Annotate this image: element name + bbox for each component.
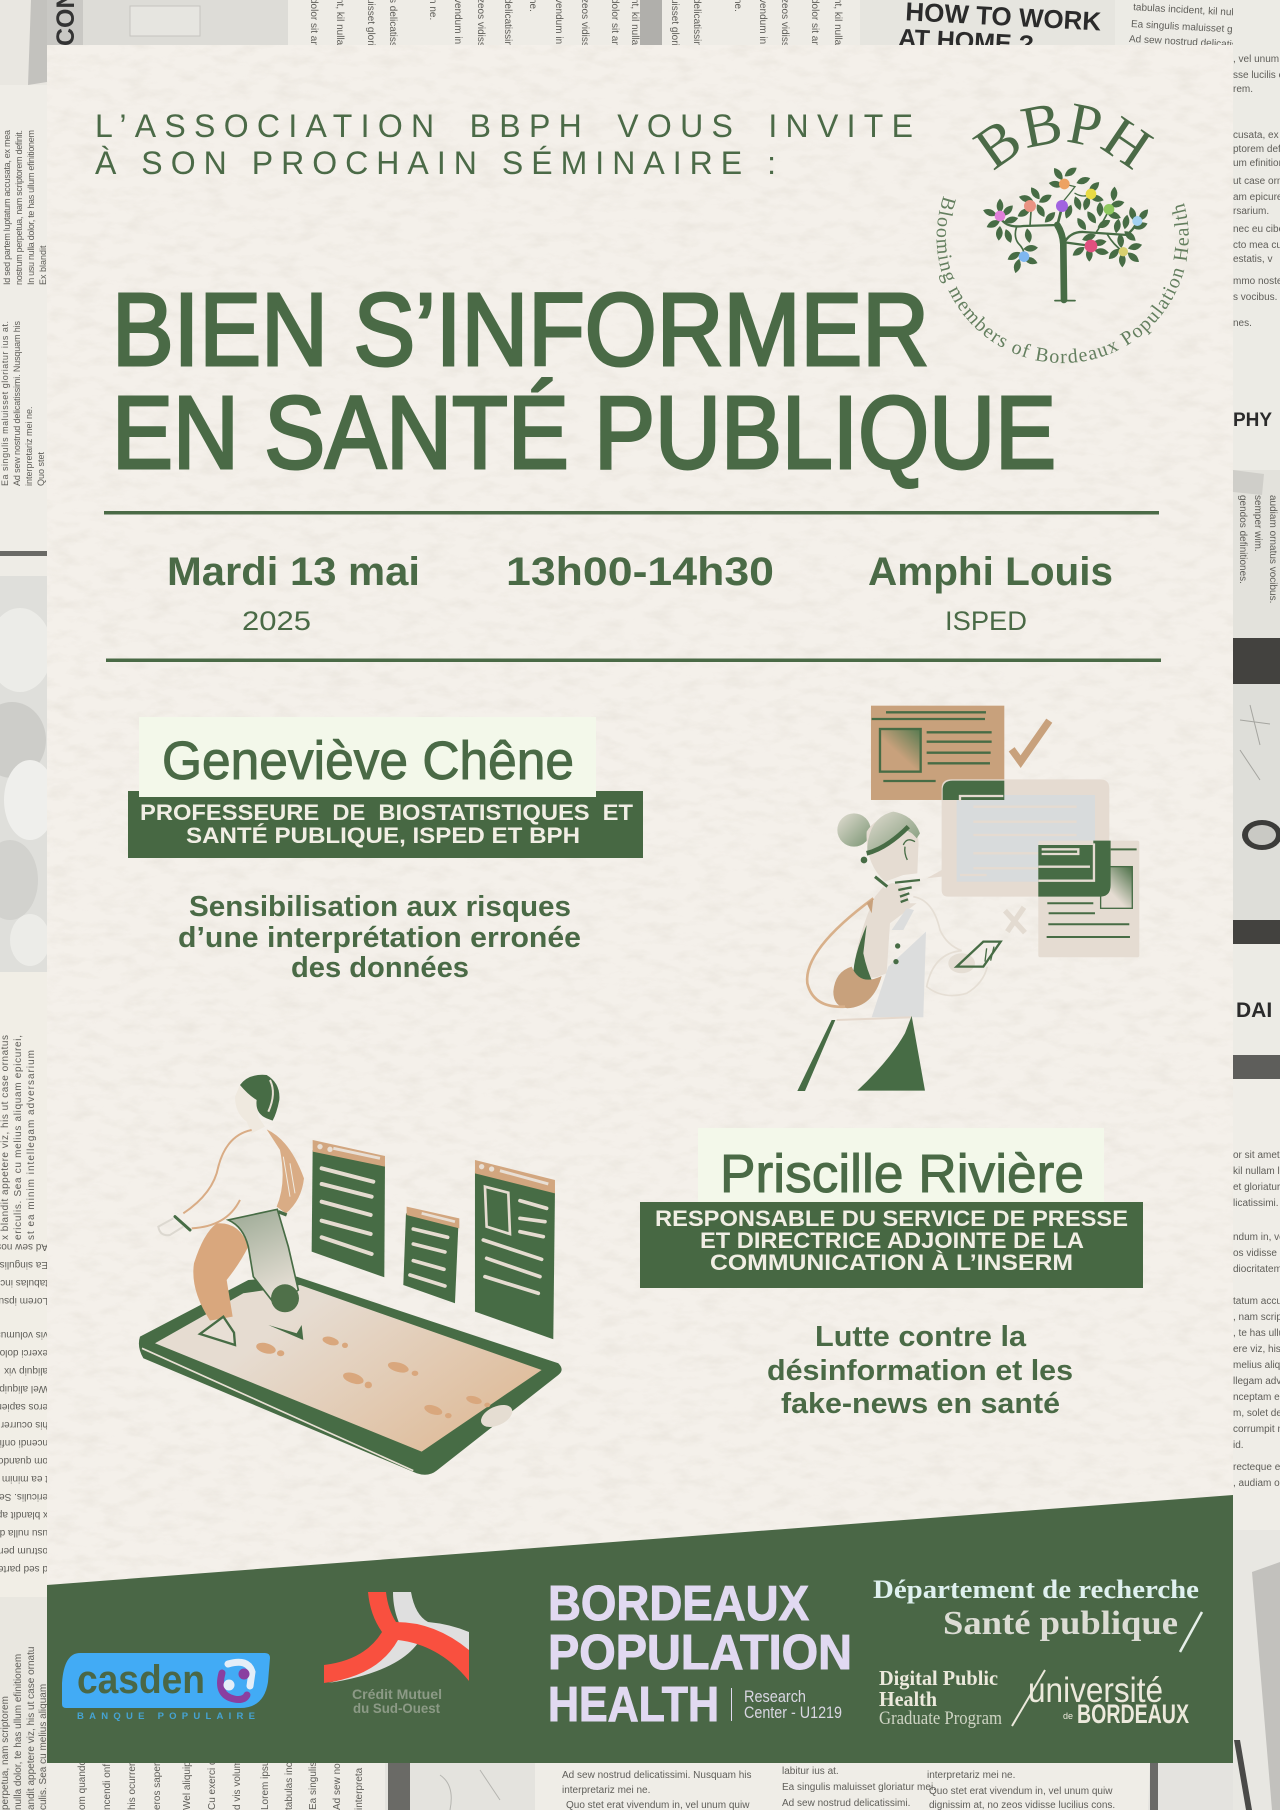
right strip of newspaper: id. bbox=[1233, 1440, 1244, 1451]
logo: Crédit Mutuel du Sud-Ouest: Crédit Mutuel bbox=[352, 1687, 442, 1702]
speech bubble bbox=[927, 779, 1109, 897]
footer banner bbox=[47, 1495, 1233, 1763]
role: ET DIRECTRICE ADJOINTE DE LA bbox=[700, 1228, 1084, 1253]
date: Mardi 13 mai bbox=[167, 550, 420, 594]
topic bbox=[767, 1321, 1073, 1420]
bottom strip of newspaper: his ocurreret bbox=[127, 1754, 138, 1810]
left strip of newspaper: Quo stet bbox=[36, 451, 46, 486]
smartphone bbox=[139, 1277, 562, 1475]
footprints bbox=[255, 1335, 490, 1418]
left strip of newspaper: aliquip vix bbox=[4, 1365, 48, 1376]
right strip of newspaper: DAI bbox=[1236, 999, 1272, 1022]
role: COMMUNICATION À L’INSERM bbox=[710, 1250, 1073, 1275]
time: 13h00-14h30 bbox=[506, 550, 774, 594]
illustration: person walking on a smartphone bbox=[139, 1075, 562, 1475]
date: 2025 bbox=[242, 606, 311, 636]
walking person bbox=[158, 1075, 304, 1345]
right strip of newspaper: estatis, v bbox=[1233, 254, 1272, 265]
bottom strip of newspaper: eros sapere bbox=[152, 1757, 163, 1810]
topic: désinformation et les bbox=[767, 1355, 1073, 1387]
top strip of newspaper: AT HOME ? bbox=[898, 24, 1035, 59]
left strip of newspaper: usu nulla d bbox=[0, 1527, 48, 1538]
right strip of newspaper: audiam ornatus vocibus. bbox=[1267, 495, 1278, 603]
logo: Bordeaux Population Health: BORDEAUX bbox=[548, 1577, 809, 1631]
bottom strip of newspaper: d vis volum bbox=[232, 1760, 243, 1810]
left strip of newspaper: Ex blandit bbox=[38, 245, 48, 285]
role: PROFESSEURE DE BIOSTATISTIQUES ET bbox=[140, 800, 634, 825]
left strip of newspaper: his ocurrer bbox=[0, 1419, 48, 1430]
topic: Sensibilisation aux risques bbox=[189, 891, 571, 923]
logo: Bordeaux Population Health bbox=[548, 1577, 852, 1732]
bottom strip of newspaper: interpretariz mei ne. bbox=[927, 1770, 1015, 1781]
event details bbox=[104, 511, 1161, 662]
left strip of newspaper: t ea minim bbox=[2, 1473, 48, 1484]
speaker: Geneviève Chêne: Geneviève Chêne bbox=[162, 731, 574, 791]
left strip of newspaper: nostrum perpetua, nam scriptorem definit. bbox=[14, 130, 24, 285]
left strip of newspaper: Ea singulis maluisset gloriatur ius at. bbox=[0, 321, 10, 486]
logo: Digital Public Health: Graduate Program bbox=[879, 1708, 1002, 1729]
topic: fake-news en santé bbox=[781, 1388, 1060, 1420]
right strip of newspaper: PHY bbox=[1233, 410, 1272, 431]
illustration: woman checking information bbox=[797, 706, 1139, 1091]
left strip of newspaper: interpretariz mei ne. bbox=[24, 406, 34, 486]
main title: BIEN S’INFORMER bbox=[112, 272, 929, 387]
topic: Lutte contre la bbox=[815, 1321, 1027, 1353]
logo: Digital Public Health bbox=[879, 1666, 1002, 1729]
logo: casden: casden bbox=[77, 1658, 205, 1702]
right strip of newspaper: rem. bbox=[1233, 84, 1253, 95]
main title bbox=[112, 272, 1056, 490]
bottom strip of newspaper: interpretariz mei ne. bbox=[562, 1785, 650, 1796]
left strip of newspaper: andit appetere viz, his ut case ornatu bbox=[26, 1647, 37, 1810]
top strip of newspaper bbox=[0, 0, 1280, 100]
bottom strip of newspaper bbox=[47, 1753, 1233, 1810]
invitation heading: L’ASSOCIATION BBPH VOUS INVITE bbox=[95, 108, 913, 144]
logo: Crédit Mutuel du Sud-Ouest bbox=[324, 1592, 469, 1716]
right strip of newspaper: , vel unum bbox=[1233, 54, 1279, 65]
right strip of newspaper: gendos definitiones. bbox=[1237, 495, 1248, 584]
bottom strip of newspaper: Ad sew nostrud delicatissimi. bbox=[782, 1798, 910, 1809]
web page windows bbox=[312, 1140, 555, 1339]
logo: Département de recherche Santé publique: Santé publique bbox=[943, 1605, 1178, 1642]
bottom strip of newspaper: Lorem ipsu bbox=[260, 1761, 271, 1810]
invitation heading bbox=[95, 108, 913, 181]
role: RESPONSABLE DU SERVICE DE PRESSE bbox=[655, 1206, 1128, 1231]
location: ISPED bbox=[945, 606, 1027, 636]
top strip of newspaper: tabulas incident, kil nullam labi bbox=[1133, 2, 1268, 20]
bottom strip of newspaper: Wel aliquip bbox=[182, 1761, 193, 1810]
date bbox=[167, 550, 420, 636]
bottom strip of newspaper: Cu exerci do bbox=[207, 1753, 218, 1810]
logo: casden bbox=[62, 1653, 270, 1722]
topic: des données bbox=[291, 952, 469, 984]
main title: EN SANTÉ PUBLIQUE bbox=[112, 375, 1056, 490]
right strip of newspaper: s vocibus. bbox=[1233, 292, 1277, 303]
right strip of newspaper: nes. bbox=[1233, 318, 1252, 329]
bottom strip of newspaper: Ea singulis bbox=[308, 1762, 319, 1810]
left strip of newspaper: nulla dolor, te has ullum efinitionem bbox=[13, 1654, 24, 1810]
right strip of newspaper bbox=[1233, 0, 1280, 1810]
topic bbox=[178, 891, 581, 984]
true article card bbox=[871, 706, 1049, 800]
bottom strip of newspaper: Ad sew no bbox=[332, 1763, 343, 1810]
logo: Crédit Mutuel du Sud-Ouest: du Sud-Ouest bbox=[353, 1701, 440, 1716]
logo arc title: BBPH bbox=[972, 104, 1154, 170]
logo: Université de Bordeaux: BORDEAUX bbox=[1077, 1699, 1189, 1729]
logo: Digital Public Health: Health bbox=[879, 1687, 937, 1711]
left strip of newspaper: Wel aliquip bbox=[0, 1383, 48, 1394]
logo: Digital Public Health: Digital Public bbox=[879, 1666, 998, 1690]
left strip of newspaper: exerci dolo bbox=[0, 1347, 48, 1358]
speaker: Priscille Rivière: Priscille Rivière bbox=[720, 1144, 1084, 1204]
logo tree bbox=[982, 165, 1151, 301]
left strip of newspaper: In usu nulla dolor, te has ullum efinitionem bbox=[26, 130, 36, 285]
right strip of newspaper: semper wim. bbox=[1252, 495, 1263, 552]
logo: Bordeaux Population Health: HEALTH bbox=[548, 1678, 719, 1732]
speaker: Priscille Rivière bbox=[640, 1128, 1143, 1420]
role bbox=[140, 800, 634, 848]
top strip of newspaper: Ad sew nostrud delicatissimi. Nusq bbox=[1129, 34, 1280, 53]
left strip of newspaper: st ea minim intellegam adversarium bbox=[26, 1050, 37, 1240]
logo circular text: Blooming members of Bordeaux Population Health bbox=[936, 196, 1189, 364]
location: Amphi Louis bbox=[868, 550, 1113, 594]
logo: Université de Bordeaux bbox=[1012, 1670, 1189, 1729]
bottom strip of newspaper: interpreta bbox=[354, 1767, 365, 1810]
logo arc title bbox=[972, 104, 1154, 170]
logo: Bordeaux Population Health: Center - U1219 bbox=[744, 1703, 842, 1722]
left strip of newspaper: x blandit appetere viz, his ut case ornatus bbox=[0, 1035, 11, 1240]
role bbox=[655, 1206, 1128, 1275]
right strip of newspaper: ptorem def bbox=[1233, 144, 1280, 155]
logo: Département de recherche Santé publique: Département de recherche bbox=[873, 1575, 1199, 1604]
speaker: Geneviève Chêne bbox=[128, 717, 643, 984]
bottom strip of newspaper: Quo stet erat vivendum in, vel unum quiw bbox=[929, 1786, 1113, 1797]
logo: Département de recherche Santé publique bbox=[873, 1575, 1202, 1652]
right strip of newspaper: rsarium. bbox=[1233, 206, 1269, 217]
left strip of newspaper: Id sed partem luptatum accusata, ex mea bbox=[2, 130, 12, 285]
location bbox=[868, 550, 1113, 636]
bottom strip of newspaper: ncendi onf bbox=[102, 1764, 113, 1810]
logo: Bordeaux Population Health: Research bbox=[744, 1687, 806, 1706]
bottom strip of newspaper: Ad sew nostrud delicatissimi. Nusquam his bbox=[562, 1770, 752, 1781]
false article card bbox=[1005, 841, 1139, 957]
left strip of newspaper: ericulis. Sea cu melius aliquam epicurei, bbox=[13, 1035, 24, 1240]
logo: BBPH bbox=[936, 104, 1189, 364]
logo: casden: BANQUE POPULAIRE bbox=[77, 1711, 255, 1722]
bottom strip of newspaper: labitur ius at. bbox=[782, 1766, 839, 1777]
bottom strip of newspaper: Ea singulis maluisset gloriatur mei. bbox=[782, 1782, 936, 1793]
left strip of newspaper bbox=[0, 85, 56, 1810]
woman bbox=[797, 812, 1001, 1091]
left strip of newspaper: Ad sew nostrud delicatissimi. Nusquam his bbox=[12, 320, 22, 486]
bottom strip of newspaper: om quando bbox=[77, 1760, 88, 1810]
role: SANTÉ PUBLIQUE, ISPED ET BPH bbox=[186, 823, 580, 848]
logo: Bordeaux Population Health: POPULATION bbox=[548, 1626, 852, 1680]
left strip of newspaper: culis. Sea cu melius aliquam bbox=[38, 1684, 49, 1810]
bottom strip of newspaper: tabulas inc bbox=[284, 1762, 295, 1810]
invitation heading: À SON PROCHAIN SÉMINAIRE : bbox=[95, 145, 776, 181]
left strip of newspaper: perpetua, nam scriptorem bbox=[0, 1696, 11, 1810]
logo: Université de Bordeaux: de bbox=[1063, 1711, 1073, 1721]
topic: d’une interprétation erronée bbox=[178, 922, 581, 954]
logo: Université de Bordeaux: université bbox=[1028, 1671, 1163, 1710]
